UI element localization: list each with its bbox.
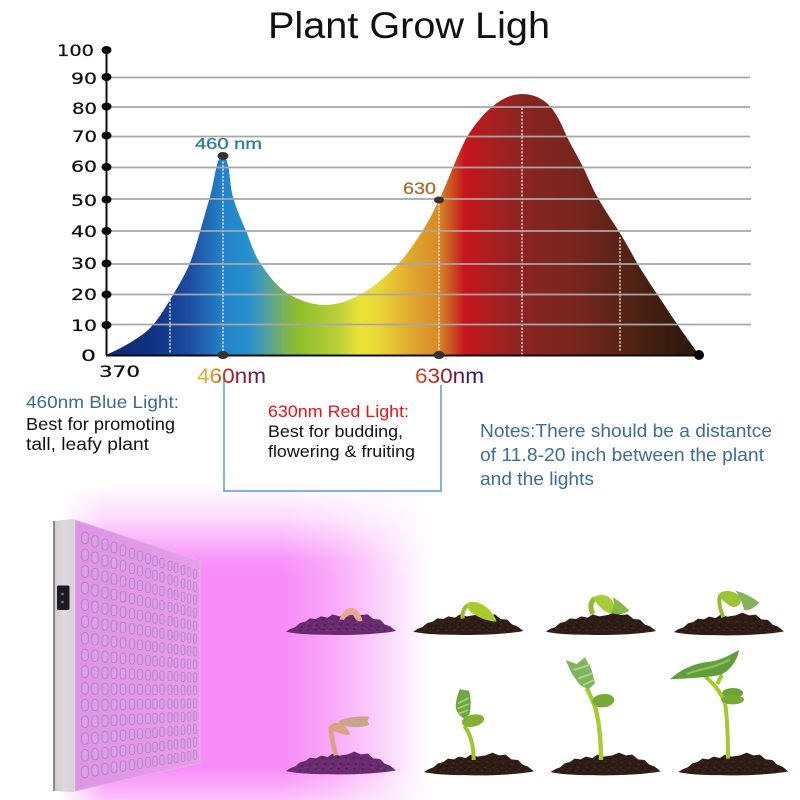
x axis label: 460nm: 460nm	[197, 365, 266, 388]
pink grow-light glow	[60, 484, 432, 800]
spectrum curve	[106, 94, 699, 355]
y axis labels: 40	[71, 222, 97, 241]
text block: blue light: Best for promoting	[26, 414, 175, 434]
stage 6: seedling with first leaf	[424, 689, 534, 775]
text block: blue light: tall, leafy plant	[26, 434, 149, 454]
y axis labels: 80	[72, 99, 97, 118]
stage 7: taller plant	[551, 657, 661, 775]
text block: red light: Best for budding,	[268, 422, 403, 441]
y axis labels: 10	[71, 316, 97, 335]
text block: blue light	[26, 392, 179, 454]
y axis labels: 20	[71, 285, 97, 304]
text block: red light	[268, 402, 415, 461]
plant growth stages	[286, 591, 788, 775]
text block: blue light: 460nm Blue Light:	[26, 392, 179, 412]
axes	[106, 50, 699, 356]
text block: distance notes: Notes:There should be a distantce	[480, 421, 772, 441]
power socket	[57, 586, 70, 610]
x axis label: 630nm: 630nm	[415, 365, 484, 388]
text block: red light: 630nm Red Light:	[268, 402, 409, 421]
panel front	[75, 520, 200, 791]
stage 3: seedling opening	[546, 595, 656, 635]
y axis labels	[57, 41, 140, 381]
LED grow light panel	[54, 519, 200, 792]
peak label: 630: 630	[403, 180, 436, 198]
y axis labels: 370	[99, 362, 140, 381]
text block: distance notes: of 11.8-20 inch between the plant	[480, 445, 764, 465]
y axis tick dots	[102, 46, 112, 329]
text block: distance notes: and the lights	[480, 469, 594, 489]
y axis labels: 90	[71, 69, 97, 88]
stage 8: plant with large leaves	[670, 650, 788, 775]
connector box between 460nm and 630nm	[224, 378, 441, 491]
LED grid	[85, 536, 195, 774]
text block: red light: flowering & fruiting	[268, 442, 415, 461]
title: Plant Grow Ligh	[268, 5, 550, 46]
panel side edge	[54, 519, 74, 792]
dotted wavelength guides	[170, 108, 620, 354]
y axis labels: 0	[81, 346, 96, 365]
peak label: 460 nm: 460 nm	[195, 136, 262, 153]
y axis labels: 30	[71, 254, 97, 273]
text block: distance notes	[480, 421, 772, 489]
y axis labels: 100	[57, 41, 94, 60]
stage 2: seedling emerging	[413, 602, 523, 635]
stage 4: seedling unfolding	[674, 591, 784, 635]
y axis labels: 70	[72, 127, 97, 146]
grid lines	[106, 78, 751, 324]
y axis labels: 50	[71, 191, 97, 210]
y axis labels: 60	[71, 157, 97, 176]
stage 1: sprouting seed under light	[286, 608, 396, 635]
spectrum chart	[57, 41, 751, 381]
stage 5: young plant under light	[286, 716, 396, 774]
peak and baseline markers	[218, 152, 704, 360]
